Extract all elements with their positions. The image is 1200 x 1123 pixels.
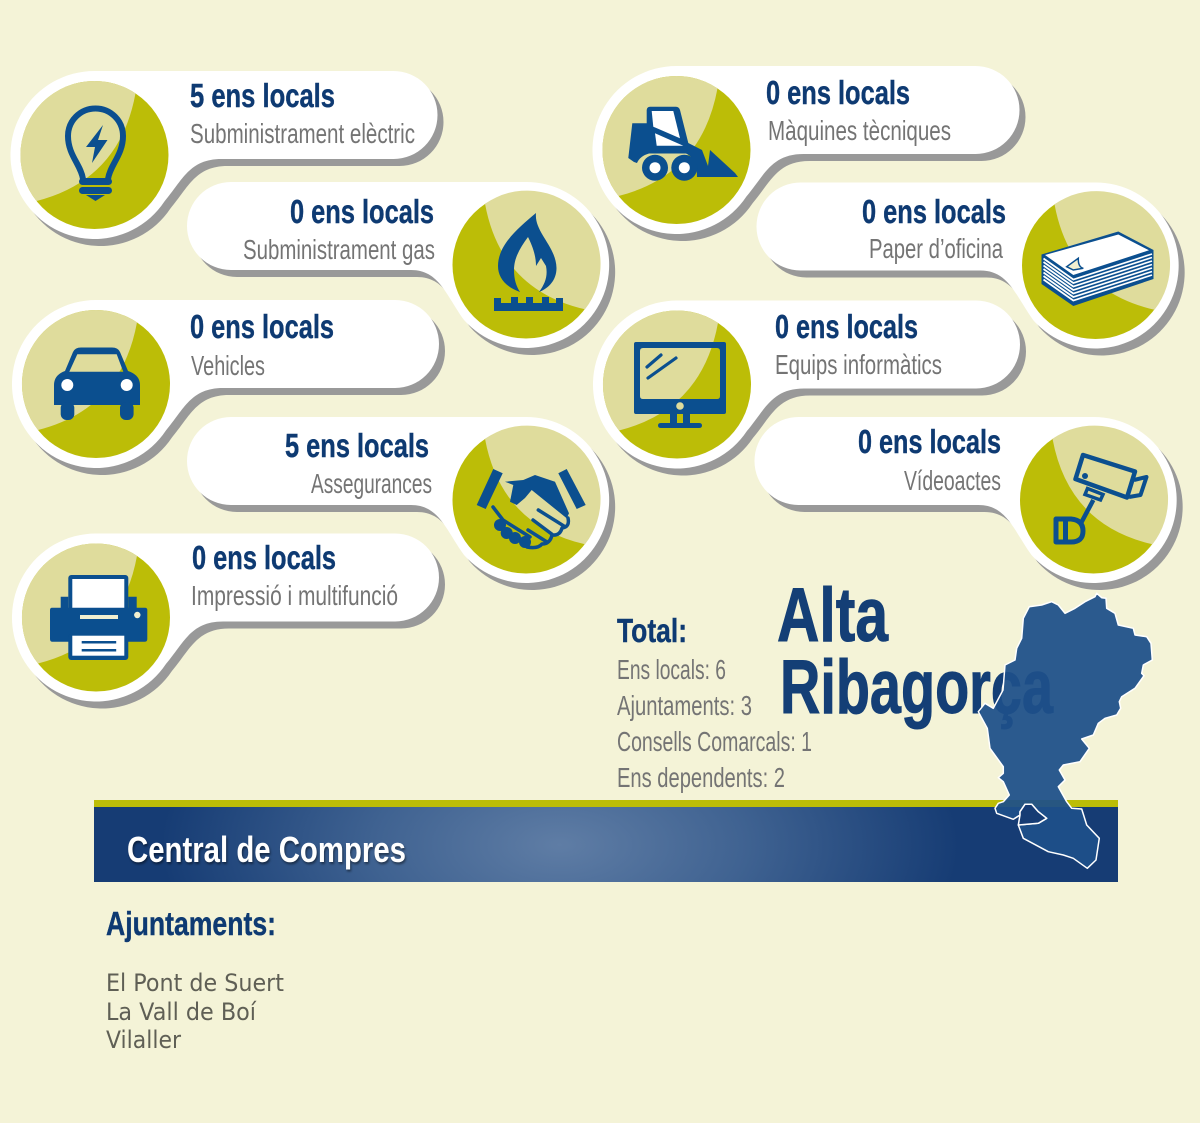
bubble [754,417,1183,590]
label: Subministrament gas [243,234,435,265]
stat: ens locals: Ens locals: 6 [617,654,726,685]
count: 0 ens locals [290,193,434,230]
panel: Vehicles [12,300,445,475]
icon: paper stack [1042,232,1154,306]
stat: consells comarcals: Consells Comarcals: 1 [617,726,812,757]
count: 0 ens locals [862,193,1006,230]
count: 0 ens locals [190,308,334,345]
panel: Màquines tècniques [592,66,1026,241]
ajuntaments list [106,969,284,1054]
ajuntaments list: Vilaller [106,1026,181,1054]
label: Màquines tècniques [768,115,951,146]
panel: Assegurances [187,417,615,590]
label: Equips informàtics [775,349,942,380]
icon: monitor [634,342,726,428]
panel: Subministrament gas [187,182,615,355]
panel: Equips informàtics [593,300,1026,476]
ajuntaments heading: Ajuntaments: [106,905,276,942]
bubble [187,182,615,355]
stat: ajuntaments: Ajuntaments: 3 [617,690,752,721]
icon: car [54,348,140,420]
ajuntaments list: La Vall de Boí [106,998,257,1026]
count: 5 ens locals [190,77,335,114]
totals block [617,612,812,793]
label: Vídeoactes [904,465,1001,496]
comarca title: Ribagorça [780,645,1054,730]
label: Impressió i multifunció [191,580,398,611]
panel: Subministrament elèctric [10,71,443,246]
icon: light bulb [68,108,123,201]
count: 5 ens locals [285,427,429,464]
bubble [756,182,1185,355]
panel: Vídeoactes [754,417,1183,590]
count: 0 ens locals [775,308,918,345]
icon: loader [628,107,738,181]
totals heading: Total: [617,612,687,649]
icon: printer [50,575,147,660]
icon: gas flame [494,213,563,311]
bubble [592,66,1026,241]
comarca title: Alta [777,573,889,658]
panel: Impressió i multifunció [12,534,445,708]
stat: ens dependents: Ens dependents: 2 [617,762,785,793]
label: Subministrament elèctric [190,118,415,149]
count: 0 ens locals [858,423,1001,460]
bubble [10,71,443,246]
bubble [187,417,615,590]
ajuntaments list: El Pont de Suert [106,969,284,997]
banner [94,800,1118,882]
bubble [12,300,445,475]
count: 0 ens locals [766,74,910,111]
label: Vehicles [191,350,265,381]
comarca title [777,573,1054,730]
count: 0 ens locals [192,539,336,576]
bubble [593,300,1026,476]
label: Assegurances [311,468,432,499]
icon: video camera [1056,455,1146,542]
map: Alta Ribagorça [978,593,1152,868]
panel: Paper d'oficina [756,182,1185,355]
map enclave [1018,804,1047,825]
label: Paper d’oficina [869,233,1003,264]
banner title: Central de Compres [127,829,406,870]
bubble [12,534,445,708]
icon: handshake [477,469,586,548]
